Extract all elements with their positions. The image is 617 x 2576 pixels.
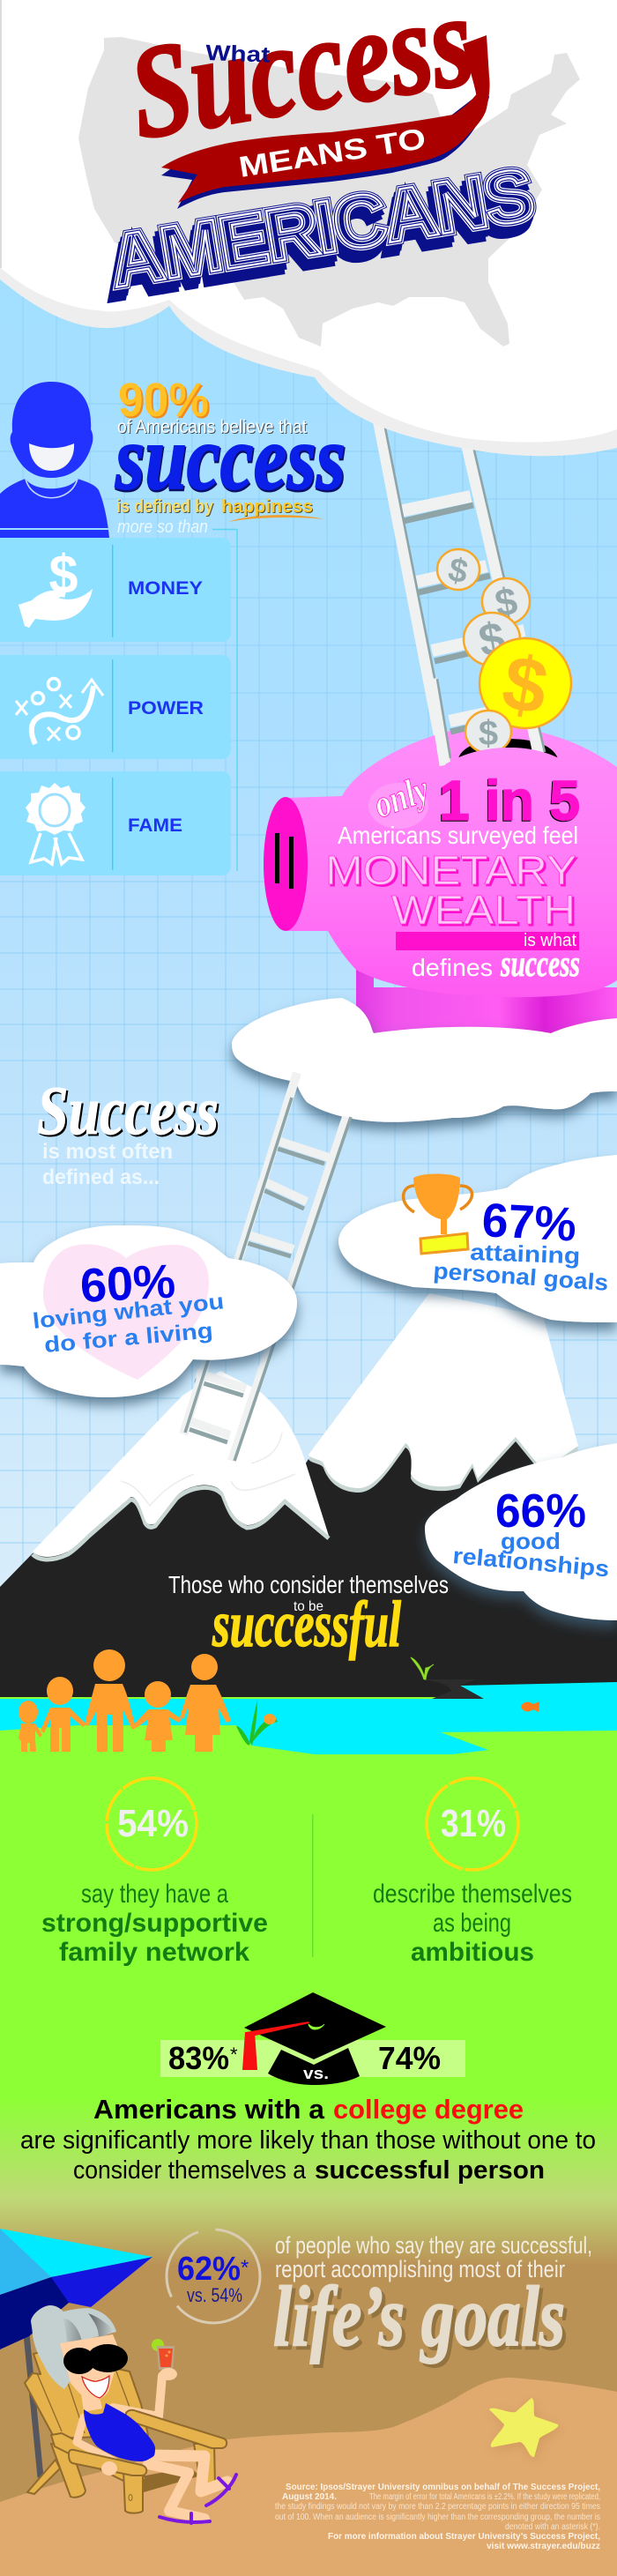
legs xyxy=(148,2455,227,2519)
stat: 54% family network xyxy=(41,1778,268,1967)
panel: money xyxy=(0,538,231,642)
source note: denoted with an asterisk (*). xyxy=(505,2521,600,2532)
left armrest xyxy=(69,2450,146,2475)
title xyxy=(98,0,541,315)
defines success: defines xyxy=(412,954,493,981)
beach umbrella xyxy=(0,2229,152,2477)
Americans surveyed feel: Americans surveyed feel xyxy=(338,822,578,849)
ladder: lower xyxy=(183,1073,351,1461)
caption: good xyxy=(501,1528,561,1554)
is what bar xyxy=(396,931,579,950)
coin 5: $ xyxy=(479,714,498,753)
divider line xyxy=(312,1814,314,1957)
ring xyxy=(107,1778,197,1870)
left snow cap xyxy=(33,1371,329,1560)
more so than: more so than xyxy=(117,517,208,537)
label: money: MONEY xyxy=(128,578,203,599)
heading line: Those who consider themselves xyxy=(168,1571,449,1598)
child 2 xyxy=(41,1677,86,1752)
ladder rails reaching the slot xyxy=(432,679,545,765)
caption xyxy=(41,1880,268,1967)
60%: 60% xyxy=(78,1254,176,1313)
line 1 xyxy=(93,2094,524,2125)
sprout xyxy=(411,1657,434,1679)
title: Americans: AMERICANS xyxy=(104,152,540,303)
is defined by happiness: happiness xyxy=(221,497,313,517)
father xyxy=(85,1649,136,1752)
caption: say they have a xyxy=(81,1880,228,1909)
chair slats xyxy=(37,2370,139,2433)
icon: fish xyxy=(521,1701,539,1712)
62%: * xyxy=(241,2256,249,2280)
hair shading xyxy=(63,2313,115,2348)
chair back legs xyxy=(27,2444,215,2494)
stat: 90% of Americans xyxy=(115,374,346,537)
defines success: success xyxy=(500,944,580,985)
heart xyxy=(43,1244,209,1380)
big gold coin xyxy=(479,637,571,731)
67%: 67% xyxy=(480,1194,577,1252)
caption: loving what you xyxy=(32,1289,225,1334)
62%: 62% xyxy=(177,2251,241,2288)
flip flops xyxy=(160,2475,236,2523)
neck xyxy=(81,2394,102,2412)
swimsuit xyxy=(84,2403,155,2461)
stat: 62% life's goals xyxy=(167,2230,592,2368)
caption xyxy=(373,1880,572,1967)
head xyxy=(60,2334,117,2400)
monetary wealth: MONETARY xyxy=(327,849,578,895)
caption xyxy=(451,1528,610,1582)
sub-heading: defined as... xyxy=(42,1165,160,1189)
piggy bank front lobe xyxy=(445,748,617,882)
74%: 74% xyxy=(378,2040,441,2076)
mother xyxy=(180,1654,231,1752)
icon: strategy play xyxy=(16,679,103,744)
pole xyxy=(22,2289,41,2477)
monetary wealth xyxy=(325,847,578,934)
is defined by happiness xyxy=(116,497,324,522)
label: power: POWER xyxy=(128,698,204,718)
line 3: consider themselves a xyxy=(73,2156,307,2185)
caption: describe themselves xyxy=(373,1880,572,1909)
54%: 54% xyxy=(117,1802,189,1845)
title: ribbon xyxy=(161,77,490,209)
top cloud with US map xyxy=(0,0,617,456)
right snow cap xyxy=(308,1293,578,1493)
drink xyxy=(152,2339,177,2380)
coin 2 xyxy=(482,578,530,626)
caption: do for a living xyxy=(43,1318,214,1358)
coin 1 xyxy=(437,549,479,592)
child 3 xyxy=(134,1681,182,1752)
woman in beach chair xyxy=(25,2305,236,2523)
sub-heading xyxy=(42,1140,173,1189)
piggy bank legs xyxy=(356,961,617,1045)
ring xyxy=(167,2230,260,2323)
piggy bank xyxy=(264,726,617,997)
stat: 31% ambitious xyxy=(373,1778,572,1967)
caption xyxy=(275,2232,592,2282)
success script: success xyxy=(115,407,346,509)
coin 5 xyxy=(465,711,511,753)
title: Americans: AMERICANS xyxy=(104,152,540,303)
coin 1: $ xyxy=(445,551,471,592)
coins xyxy=(437,549,571,753)
right armrest xyxy=(126,2410,227,2448)
icon: happy person xyxy=(0,382,109,538)
title: Americans: AMERICANS xyxy=(100,163,536,315)
icon: trophy xyxy=(404,1174,472,1254)
to be: to be xyxy=(294,1599,323,1614)
of Americans believe that: of Americans believe that xyxy=(118,418,308,438)
pig body xyxy=(286,726,617,997)
icon: hand with dollar xyxy=(19,545,93,628)
coin 2: $ xyxy=(492,579,521,626)
title: means to: MEANS TO xyxy=(236,122,427,183)
caption: ambitious xyxy=(411,1938,534,1967)
successful script: successful xyxy=(212,1589,401,1661)
icon: family holding hands xyxy=(19,1649,231,1752)
caption xyxy=(32,1289,225,1358)
sub-heading: is most often xyxy=(42,1140,173,1164)
big gold coin: $ xyxy=(496,637,554,731)
caption: attaining xyxy=(470,1239,581,1269)
cloud: 66% good relationships xyxy=(425,1443,617,1620)
pig snout xyxy=(264,797,308,931)
connector line xyxy=(212,529,237,871)
only: only xyxy=(368,767,435,826)
piggy bank text xyxy=(325,767,580,985)
line 2: are significantly more likely than those without one to xyxy=(20,2126,596,2155)
left arm xyxy=(77,2417,115,2461)
caption: personal goals xyxy=(433,1257,609,1296)
line 3 xyxy=(73,2156,545,2185)
Success script heading: Success xyxy=(37,1072,219,1149)
line 1: college degree xyxy=(333,2094,524,2125)
caption: as being xyxy=(433,1909,511,1938)
monetary wealth: WEALTH xyxy=(391,887,576,933)
31%: 31% xyxy=(441,1802,506,1845)
US map silhouette xyxy=(78,37,580,346)
icon: graduation cap xyxy=(242,1992,386,2085)
caption: family network xyxy=(59,1938,249,1967)
mountain base overlay on lake xyxy=(423,1679,484,1699)
vs.: vs. xyxy=(303,2065,329,2082)
ladder: upper, from top cloud to piggy bank xyxy=(377,414,545,765)
college stat band xyxy=(160,1992,465,2085)
panel: power xyxy=(0,655,231,759)
panel: fame xyxy=(0,771,231,875)
is defined by happiness: is defined by xyxy=(116,497,214,517)
source note: August 2014. xyxy=(282,2491,337,2502)
mountains xyxy=(0,1293,617,1710)
source note: Source: Ipsos/Strayer University omnibus on behalf of The Success Project, xyxy=(286,2482,600,2492)
of Americans believe that: of Americans believe that xyxy=(117,417,307,437)
title: What: What xyxy=(205,41,271,68)
cloud under piggy bank xyxy=(232,998,617,1122)
90% number: 90% xyxy=(120,376,211,428)
chair seat side and front legs xyxy=(51,2433,145,2513)
chair back xyxy=(25,2352,148,2438)
sunglasses xyxy=(63,2344,128,2374)
source note: visit www.strayer.edu/buzz xyxy=(487,2541,600,2551)
icon: hand with dollar: $ xyxy=(49,545,78,606)
title: Americans: AMERICANS xyxy=(101,159,538,309)
cloud: 60% loving what you do xyxy=(0,1225,297,1397)
vs 54%: vs. 54% xyxy=(187,2284,242,2306)
sky background with grid xyxy=(0,0,617,1763)
83%: 83% xyxy=(168,2040,229,2076)
success script: success xyxy=(115,409,346,510)
lake xyxy=(0,1682,617,1754)
90% number: 90% xyxy=(118,374,209,427)
label: fame: FAME xyxy=(128,815,182,836)
caption: relationships xyxy=(451,1542,610,1582)
line 3: successful person xyxy=(315,2156,545,2185)
is defined by happiness: is defined by xyxy=(117,498,215,517)
heading: those who consider themselves successful xyxy=(168,1571,449,1661)
coin slot xyxy=(458,739,559,762)
chair bolt xyxy=(129,2495,132,2500)
right arm and hand xyxy=(113,2376,162,2416)
monetary wealth: MONETARY xyxy=(325,847,576,893)
title: Americans: AMERICANS xyxy=(104,152,540,303)
plant and flower xyxy=(236,1700,278,1746)
line 1: Americans with a xyxy=(93,2094,325,2125)
caption xyxy=(433,1239,609,1296)
child 1 xyxy=(19,1701,42,1752)
1 in 5: 1 in 5 xyxy=(438,770,579,833)
83%: * xyxy=(230,2044,238,2066)
beach sand xyxy=(0,2378,617,2576)
coin 3 xyxy=(464,613,520,667)
ring xyxy=(427,1778,518,1870)
icon: award ribbon xyxy=(26,783,85,864)
1 in 5: 1 in 5 xyxy=(439,769,580,832)
66%: 66% xyxy=(495,1485,586,1537)
defines success xyxy=(412,944,580,985)
title: Americans: AMERICANS xyxy=(104,152,540,303)
is defined by happiness: happiness xyxy=(222,498,314,517)
smile xyxy=(82,2376,109,2398)
is what bar: is what xyxy=(524,931,576,950)
hand on armrest xyxy=(101,2461,117,2475)
college degree statement xyxy=(20,2094,596,2185)
source note: For more information about Strayer University’s Success Project, xyxy=(328,2531,600,2542)
coin 3: $ xyxy=(475,613,509,667)
source note xyxy=(275,2482,600,2551)
hair xyxy=(31,2305,116,2389)
icon: starfish xyxy=(489,2398,560,2461)
monetary wealth: WEALTH xyxy=(393,889,577,934)
heading: success is most often defined as xyxy=(37,1072,220,1189)
caption: strong/supportive xyxy=(41,1909,268,1938)
cloud: 67% attaining personal goals xyxy=(338,1155,617,1322)
Success script heading: Success xyxy=(39,1074,220,1150)
ground and lake xyxy=(0,1679,617,2576)
